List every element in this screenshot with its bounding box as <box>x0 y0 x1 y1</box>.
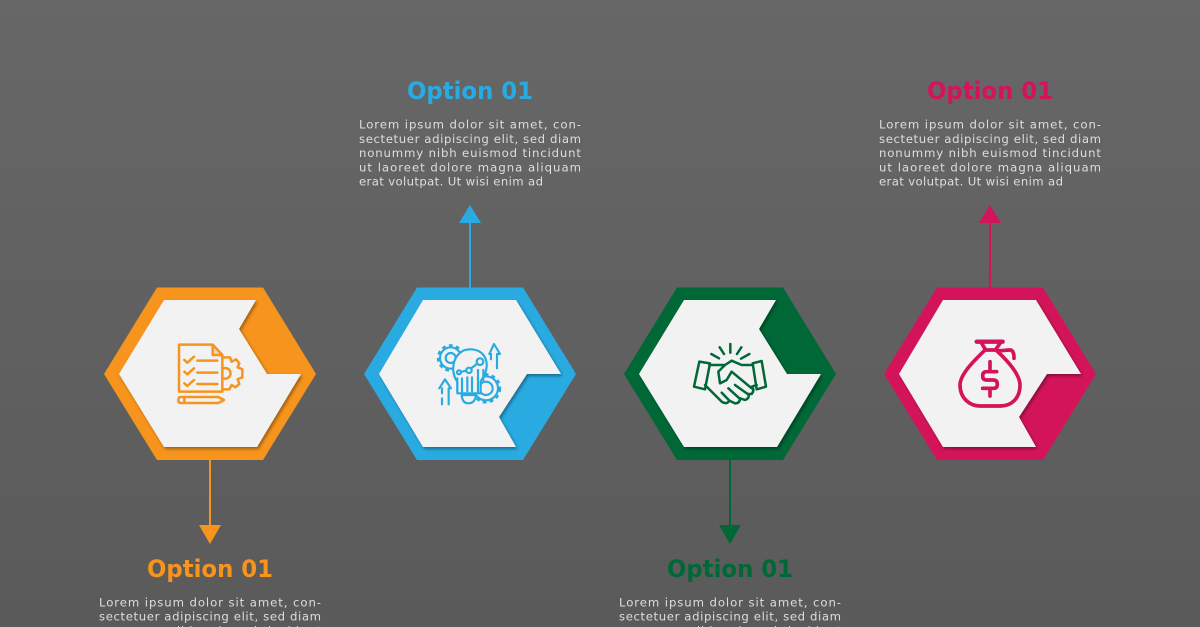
panel: option 1 orange <box>99 288 321 627</box>
text block: option 2: nonummy nibh euismod tincidunt <box>359 146 581 160</box>
arrow: green down <box>719 460 741 544</box>
text block: option 2: Lorem ipsum dolor sit amet, con- <box>359 118 581 132</box>
hexagon: crimson <box>884 288 1096 460</box>
text block: option 4: ut laoreet dolore magna aliquam <box>879 160 1101 174</box>
heading: option 3: Option 01 <box>667 555 793 583</box>
text block: option 2 <box>359 118 581 188</box>
text block: option 1: sectetuer adipiscing elit, sed diam <box>99 610 321 624</box>
panel: option 4 crimson <box>879 77 1101 460</box>
icon: checklist with gear and pencil <box>178 345 242 403</box>
heading: option 2: Option 01 <box>407 77 533 105</box>
icon: money bag <box>960 342 1020 406</box>
arrow: crimson up <box>979 205 1001 288</box>
hexagon: blue <box>364 288 576 460</box>
text block: option 4 <box>879 118 1101 188</box>
text block: option 4: nonummy nibh euismod tincidunt <box>879 146 1101 160</box>
panel: option 2 blue <box>359 77 581 460</box>
panel: option 3 green <box>619 288 841 627</box>
text block: option 2: sectetuer adipiscing elit, sed diam <box>359 132 581 146</box>
text block: option 4: Lorem ipsum dolor sit amet, con- <box>879 118 1101 132</box>
arrow: orange down <box>199 460 221 544</box>
icon: head with gears and growth arrows <box>438 344 500 404</box>
arrow: blue up <box>459 205 481 288</box>
text block: option 3: Lorem ipsum dolor sit amet, con- <box>619 596 841 610</box>
heading: option 4: Option 01 <box>927 77 1053 105</box>
text block: option 1 <box>99 596 321 627</box>
text block: option 1: Lorem ipsum dolor sit amet, con- <box>99 596 321 610</box>
text block: option 3 <box>619 596 841 627</box>
text block: option 2: erat volutpat. Ut wisi enim ad <box>359 174 543 188</box>
icon: handshake <box>694 344 766 403</box>
hexagon: green <box>624 288 836 460</box>
text block: option 2: ut laoreet dolore magna aliquam <box>359 160 581 174</box>
heading: option 1: Option 01 <box>147 555 273 583</box>
text block: option 4: erat volutpat. Ut wisi enim ad <box>879 174 1063 188</box>
hexagon: orange <box>104 288 316 460</box>
text block: option 4: sectetuer adipiscing elit, sed diam <box>879 132 1101 146</box>
text block: option 3: sectetuer adipiscing elit, sed diam <box>619 610 841 624</box>
